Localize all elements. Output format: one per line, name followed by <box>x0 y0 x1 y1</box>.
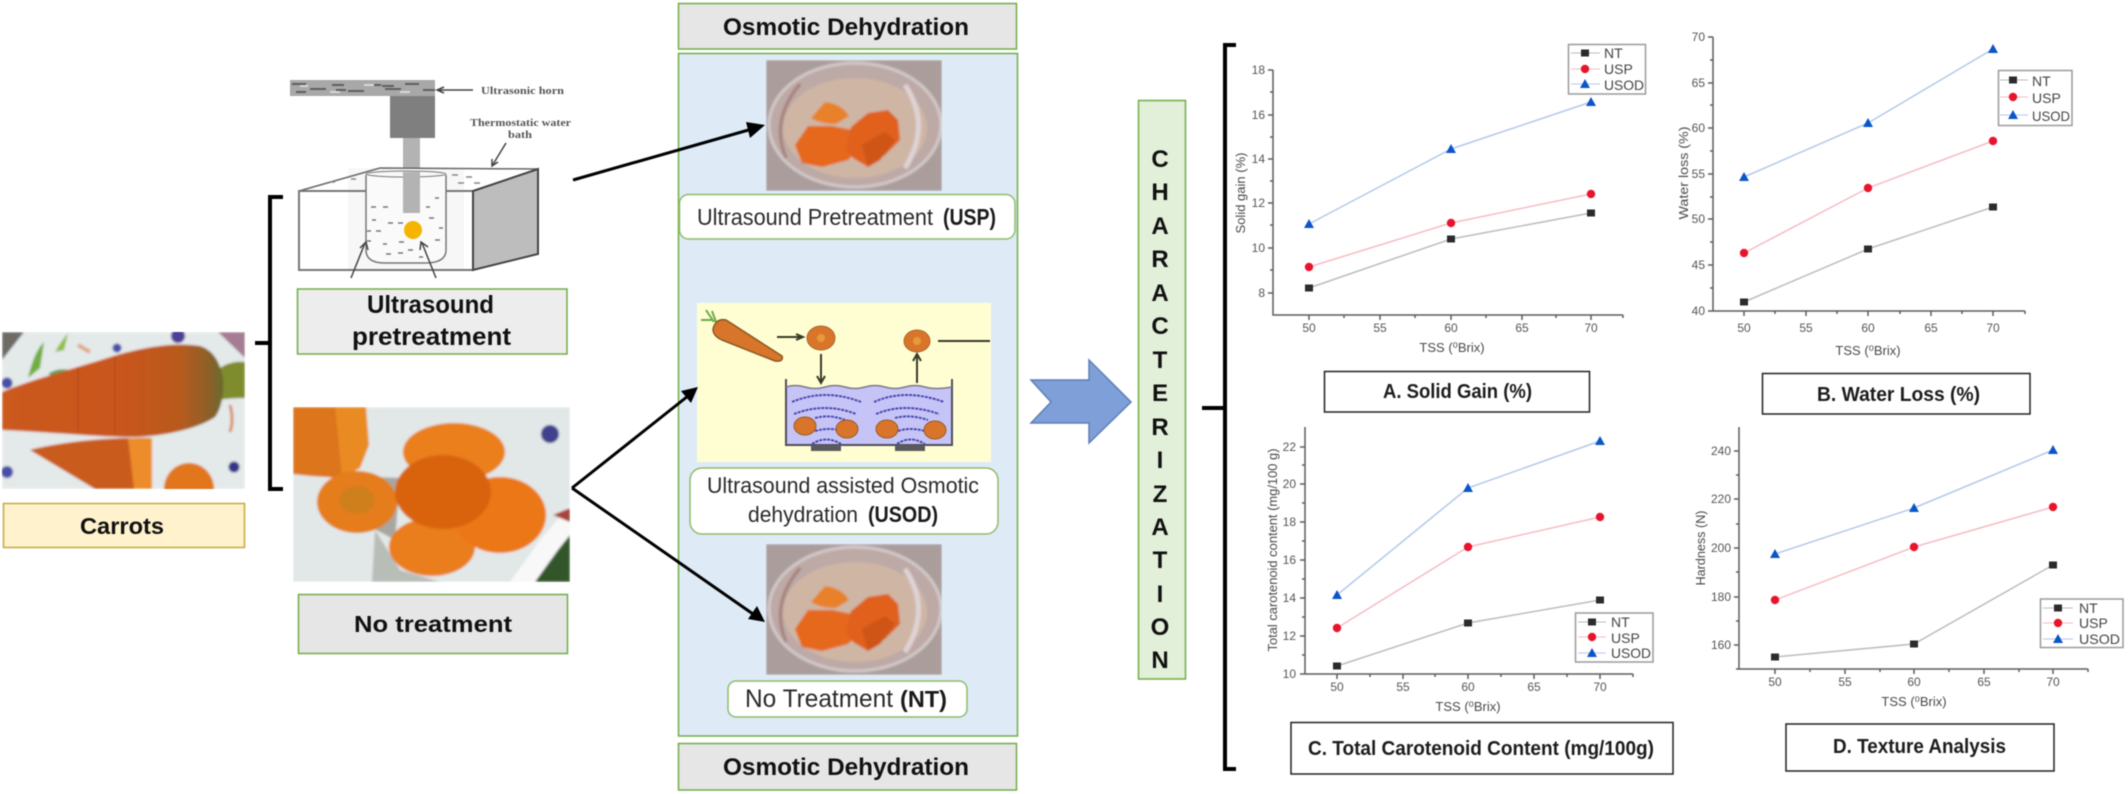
chart: B water loss: 45 <box>1692 258 1705 272</box>
chart: D texture analysis: 220 <box>1711 492 1731 506</box>
series: USP <box>1771 503 2057 604</box>
legend: NT <box>2032 73 2051 89</box>
chart: B water loss: 60 <box>1861 321 1875 335</box>
chart: C total carotenoid content: Total carotenoid content (mg/100 g) <box>1265 448 1280 652</box>
label: ultrasound pretreatment <box>298 289 567 354</box>
series: USOD <box>1739 44 1998 181</box>
panel: characterization: C <box>1151 146 1169 173</box>
annotation: ultrasonic horn <box>437 85 564 97</box>
label: no treatment NT: (NT) <box>900 686 947 712</box>
chart: C total carotenoid content: 22 <box>1283 440 1296 454</box>
chart: D texture analysis: 240 <box>1711 444 1731 458</box>
panel: characterization: T <box>1153 347 1168 374</box>
caption: D texture analysis <box>1786 724 2054 771</box>
series: USP <box>1305 190 1595 271</box>
chart: C total carotenoid content: 10 <box>1283 667 1296 681</box>
panel: characterization: A <box>1151 213 1169 240</box>
chart: B water loss: 65 <box>1924 321 1938 335</box>
label: ultrasound pretreatment: pretreatment <box>352 323 512 351</box>
legend: USP <box>1611 630 1640 646</box>
series: USP <box>1740 137 1997 257</box>
label: ultrasound pretreatment USP: (USP) <box>943 204 996 230</box>
diagram: ultrasound assisted osmotic dehydration <box>697 303 991 462</box>
chart: A solid gain: Solid gain (%) <box>1233 153 1248 233</box>
chart: A solid gain: 65 <box>1515 321 1529 335</box>
bracket: characterization results <box>1202 45 1236 769</box>
series: NT <box>1771 562 2057 660</box>
panel: characterization: H <box>1151 179 1169 206</box>
ultrasonic horn <box>290 80 435 213</box>
series: USOD <box>1304 97 1596 228</box>
panel: characterization: I <box>1157 447 1163 474</box>
label: ultrasound assisted osmotic dehydration USOD: Ultrasound assisted Osmotic <box>707 473 979 498</box>
photo: bowl no treatment <box>766 544 942 675</box>
legend: NT <box>1604 45 1623 61</box>
panel: characterization: I <box>1157 581 1163 608</box>
annotation: thermostatic water bath: bath <box>508 129 532 141</box>
heading: osmotic dehydration top: Osmotic Dehydration <box>723 14 969 41</box>
legend: NT <box>2079 600 2098 616</box>
chart: C total carotenoid content: 12 <box>1283 629 1296 643</box>
legend <box>1568 44 1646 94</box>
chart: C total carotenoid content <box>1265 427 1653 714</box>
legend: USOD <box>1611 645 1651 661</box>
heading: osmotic dehydration bottom: Osmotic Dehydration <box>723 754 969 781</box>
legend: USOD <box>1604 77 1644 93</box>
panel: characterization: O <box>1151 614 1169 641</box>
chart: D texture analysis: 200 <box>1711 541 1731 555</box>
legend <box>2040 599 2123 648</box>
chart: B water loss: TSS (⁰Brix) <box>1835 343 1901 358</box>
chart: D texture analysis: 160 <box>1711 638 1731 652</box>
caption: B water loss <box>1762 374 2030 414</box>
slice arrows <box>777 334 990 383</box>
caption: C total carotenoid content <box>1291 722 1673 774</box>
arrow: no treatment to USOD <box>572 387 698 488</box>
legend <box>1576 613 1653 662</box>
legend: USOD <box>2032 108 2070 124</box>
panel: characterization: C <box>1151 313 1169 340</box>
chart: B water loss: 50 <box>1692 212 1705 226</box>
panel: characterization: E <box>1152 380 1168 407</box>
label: ultrasound pretreatment: Ultrasound <box>367 291 494 319</box>
chart: D texture analysis: 60 <box>1907 675 1921 689</box>
label: carrots: Carrots <box>80 513 164 539</box>
series: USOD <box>1332 436 1605 599</box>
chart: D texture analysis: 50 <box>1768 675 1782 689</box>
arrow: no treatment to NT bowl <box>572 488 765 622</box>
panel: characterization: R <box>1151 246 1169 273</box>
caption: B water loss: B. Water Loss (%) <box>1817 384 1980 406</box>
chart: D texture analysis: 180 <box>1711 590 1731 604</box>
series: USOD <box>1770 445 2058 558</box>
label: no treatment NT: No Treatment <box>745 685 893 713</box>
chart: D texture analysis <box>1693 427 2123 709</box>
chart: A solid gain: 60 <box>1444 321 1458 335</box>
chart: C total carotenoid content: 55 <box>1396 680 1410 694</box>
label: ultrasound assisted osmotic dehydration USOD: (USOD) <box>868 502 938 527</box>
label: ultrasound assisted osmotic dehydration USOD <box>690 468 998 534</box>
panel: characterization: A <box>1151 514 1169 541</box>
chart: C total carotenoid content: 14 <box>1283 591 1296 605</box>
arrow: ultrasound to USP bowl <box>573 122 765 180</box>
chart: B water loss: 70 <box>1692 30 1705 44</box>
chart: C total carotenoid content: 70 <box>1593 680 1607 694</box>
panel: characterization: Z <box>1153 481 1167 508</box>
label: ultrasound pretreatment USP <box>680 194 1015 239</box>
chart: A solid gain: 14 <box>1252 152 1265 166</box>
carrot slices <box>807 326 930 352</box>
chart: D texture analysis: TSS (⁰Brix) <box>1881 694 1947 709</box>
label: no treatment <box>298 594 568 654</box>
diagram: ultrasonic bath with horn <box>290 80 571 278</box>
heading: osmotic dehydration bottom <box>678 744 1016 790</box>
label: no treatment NT <box>728 681 967 717</box>
legend: USOD <box>2079 631 2120 647</box>
chart: A solid gain: 12 <box>1252 196 1265 210</box>
series: NT <box>1740 204 1997 306</box>
chart: C total carotenoid content: 20 <box>1283 477 1296 491</box>
panel: characterization <box>1138 100 1186 679</box>
chart: B water loss: Water loss (%) <box>1676 126 1691 220</box>
chart: A solid gain: 10 <box>1252 241 1265 255</box>
chart: D texture analysis: Hardness (N) <box>1693 510 1708 586</box>
chart: A solid gain: 70 <box>1584 321 1598 335</box>
label: carrots <box>4 504 244 548</box>
label: no treatment: No treatment <box>354 611 512 637</box>
chart: B water loss: 60 <box>1692 121 1705 135</box>
chart: D texture analysis: 65 <box>1977 675 1991 689</box>
chart: A solid gain: 55 <box>1373 321 1387 335</box>
chart: B water loss: 40 <box>1692 304 1705 318</box>
chart: C total carotenoid content: 50 <box>1330 680 1344 694</box>
legend: NT <box>1611 614 1630 630</box>
photo: carrot slices without treatment <box>293 407 570 582</box>
label: ultrasound assisted osmotic dehydration USOD: dehydration <box>748 502 858 527</box>
chart: C total carotenoid content: 18 <box>1283 515 1296 529</box>
chart: C total carotenoid content: TSS (⁰Brix) <box>1435 699 1501 714</box>
panel: characterization: A <box>1151 280 1169 307</box>
water bath <box>299 168 538 278</box>
panel: characterization: R <box>1151 414 1169 441</box>
chart: D texture analysis: 55 <box>1838 675 1852 689</box>
label: ultrasound pretreatment USP: Ultrasound Pretreatment <box>697 204 934 230</box>
panel: osmotic dehydration treatments <box>678 54 1018 736</box>
photo: bowl ultrasound pretreated <box>766 60 942 191</box>
chart: B water loss: 65 <box>1692 76 1705 90</box>
chart: B water loss: 55 <box>1799 321 1813 335</box>
annotation: ultrasonic horn: Ultrasonic horn <box>481 85 564 97</box>
annotation: thermostatic water bath: Thermostatic water <box>470 117 571 129</box>
heading: osmotic dehydration top <box>678 4 1016 49</box>
chart: A solid gain <box>1233 44 1646 355</box>
chart: B water loss: 70 <box>1986 321 2000 335</box>
chart: A solid gain: 8 <box>1258 286 1265 300</box>
photo: whole carrots <box>1 331 246 490</box>
caption: C total carotenoid content: C. Total Carotenoid Content (mg/100g) <box>1308 738 1654 760</box>
chart: D texture analysis: 70 <box>2046 675 2060 689</box>
caption: D texture analysis: D. Texture Analysis <box>1833 736 2006 758</box>
chart: B water loss <box>1676 30 2072 358</box>
legend: USP <box>1604 61 1633 77</box>
series: NT <box>1333 596 1604 670</box>
chart: B water loss: 50 <box>1737 321 1751 335</box>
ultrasonic tank <box>786 379 952 451</box>
chart: C total carotenoid content: 65 <box>1527 680 1541 694</box>
caption: A solid gain <box>1324 372 1590 412</box>
chart: A solid gain: TSS (⁰Brix) <box>1419 340 1485 355</box>
panel: characterization: T <box>1153 547 1168 574</box>
chart: B water loss: 55 <box>1692 167 1705 181</box>
chart: C total carotenoid content: 60 <box>1461 680 1475 694</box>
annotation: thermostatic water bath <box>470 117 571 166</box>
chart: A solid gain: 16 <box>1252 108 1265 122</box>
panel: characterization: N <box>1151 647 1169 674</box>
legend: USP <box>2032 90 2061 106</box>
arrow: block arrow to characterization <box>1031 360 1131 443</box>
series: NT <box>1305 210 1595 292</box>
chart: C total carotenoid content: 16 <box>1283 553 1296 567</box>
legend <box>1998 70 2072 126</box>
carrot <box>701 310 782 361</box>
caption: A solid gain: A. Solid Gain (%) <box>1383 381 1532 403</box>
series: USP <box>1333 513 1604 632</box>
chart: A solid gain: 18 <box>1252 63 1265 77</box>
bracket: treatment split <box>255 197 283 489</box>
legend: USP <box>2079 615 2108 631</box>
chart: A solid gain: 50 <box>1302 321 1316 335</box>
